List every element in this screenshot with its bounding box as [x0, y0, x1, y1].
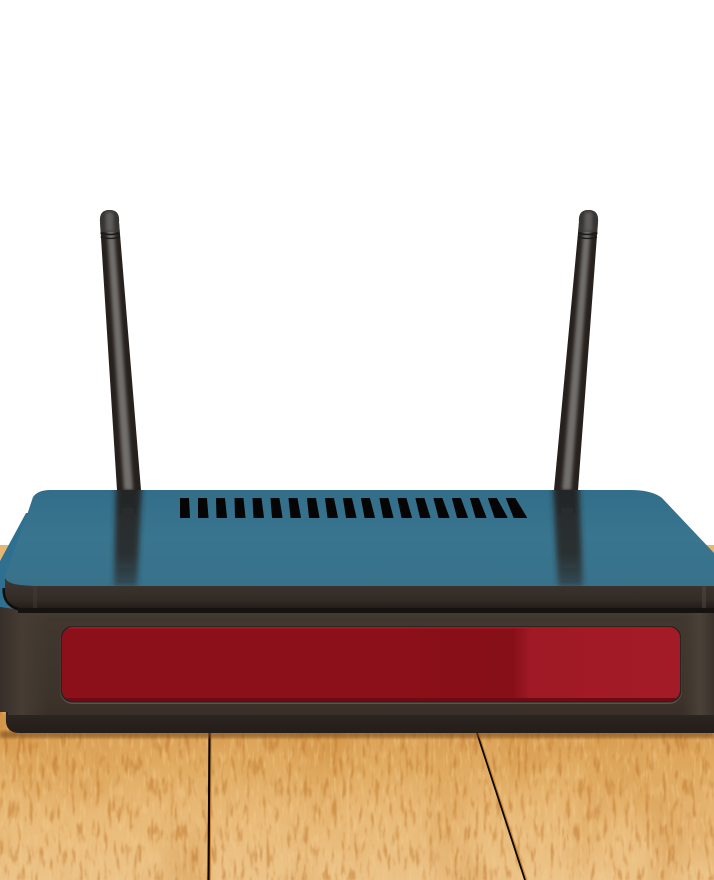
lid top: [5, 484, 714, 586]
antenna shadows on lid: [114, 484, 583, 586]
plank seam right: [477, 733, 526, 880]
left antenna: [100, 209, 141, 490]
lid front edge: [4, 577, 714, 613]
base: [6, 705, 714, 733]
red front panel: [60, 625, 682, 704]
wooden table: [0, 545, 714, 880]
right antenna: [554, 209, 599, 490]
table visible behind router, left: [0, 545, 9, 561]
ventilation slots: [180, 498, 526, 518]
rear blue edge: [0, 513, 60, 614]
plank seam left: [208, 733, 211, 880]
body front: [0, 607, 714, 715]
illustration: wireless router on wooden table: [0, 210, 714, 880]
shadow under router: [0, 731, 714, 738]
router: [0, 209, 714, 733]
table visible behind router, right: [705, 545, 714, 553]
